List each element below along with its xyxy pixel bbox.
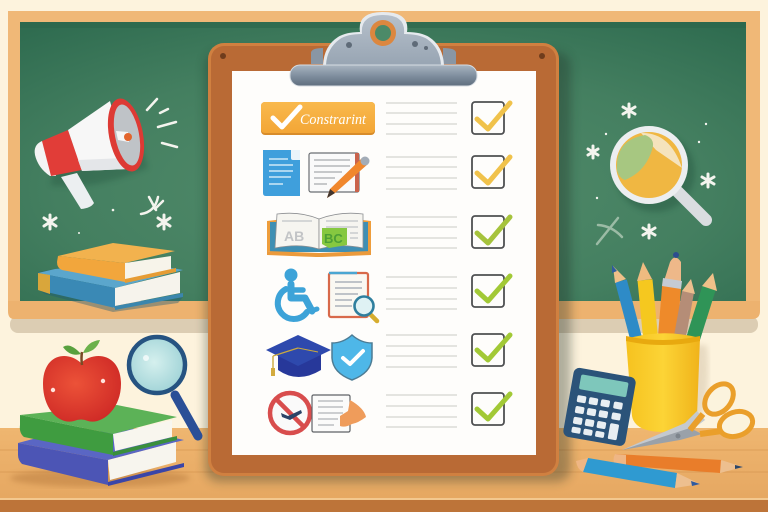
checkbox 6 [472,393,510,425]
icon: magnifier on board [610,126,706,220]
checkboxes [472,102,510,425]
checkbox 5 [472,334,510,366]
books stack on table [10,405,190,487]
row 3: open book ABC: AB [284,228,304,244]
chalk doodles right [588,104,714,244]
clipboard [208,43,559,476]
checkbox 4 [472,275,510,307]
pencils on table [576,454,743,488]
row 2: document and notebook with pencil [263,150,370,198]
icon: megaphone [35,95,150,209]
icon: apple [43,340,121,422]
clipboard shadow [205,52,571,482]
row 3: open book ABC: BC [324,231,343,246]
clipboard clip [290,12,477,86]
chalk doodles left [44,99,177,234]
checkbox 3 [472,216,510,248]
row 4: wheelchair and inspected document [278,268,377,321]
pencils [612,252,717,342]
row 3: open book ABC [267,213,371,257]
row 6: prohibition sign and held document [270,393,366,433]
table [0,428,768,512]
row 1: constraint badge: Constrarint [300,112,367,128]
pencil cup [612,252,717,432]
scissors [622,378,756,450]
row text lines (blank rules) [386,103,457,427]
books stack on ledge [38,243,183,312]
paper sheet [232,71,536,455]
checkbox 2 [472,156,510,188]
chalkboard [8,11,760,333]
icon: magnifier on table [129,337,198,436]
row 5: graduation cap and shield [266,335,372,380]
board ledge [8,301,760,319]
checkbox 1 [472,102,510,134]
row 1: constraint badge [261,102,375,135]
calculator [562,367,637,447]
